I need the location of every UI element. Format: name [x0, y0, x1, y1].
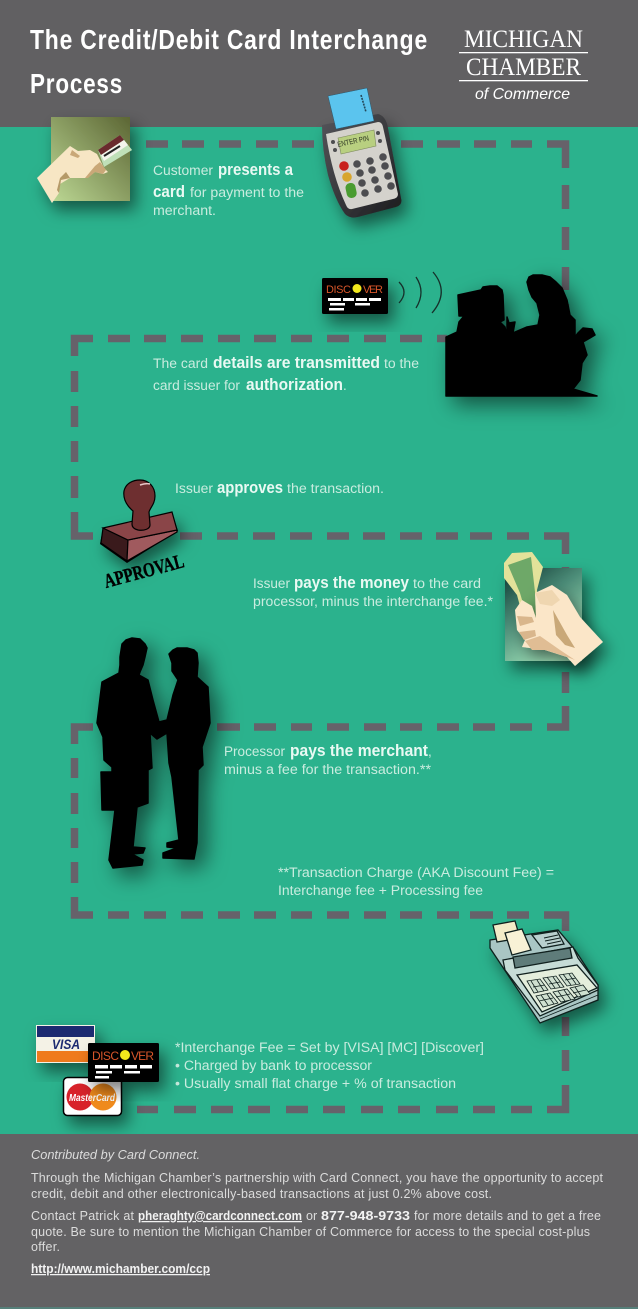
text: step 5: minus a fee for the transaction.**	[224, 762, 432, 777]
icon: two businessmen shaking hands	[97, 638, 210, 868]
text: step 5: ,	[428, 744, 432, 759]
text: interchange fee note: • Usually small flat charge + % of transaction	[175, 1076, 456, 1091]
text: interchange fee note: • Charged by bank to processor	[175, 1058, 373, 1073]
web link: http://www.michamber.com/ccp	[31, 1262, 210, 1276]
title: The Credit/Debit Card Interchange	[30, 24, 428, 55]
text: step 3	[175, 478, 384, 497]
logo: Michigan Chamber of Commerce	[459, 26, 588, 103]
text: step 4: processor, minus the interchange fee.*	[253, 594, 494, 609]
icon: Discover card small	[88, 1043, 159, 1082]
text: step 3: the transaction.	[287, 481, 384, 496]
icon: MasterCard	[64, 1078, 122, 1116]
icon: adding machine	[490, 921, 598, 1023]
footer panel	[0, 1134, 638, 1309]
title: Process	[30, 68, 123, 99]
text: step 2: to the	[384, 356, 419, 371]
text: step 3: Issuer	[175, 481, 214, 496]
icon: hand holding money	[504, 552, 603, 666]
header band	[0, 0, 638, 127]
text: step 3: approves	[217, 478, 283, 497]
title	[30, 24, 428, 99]
text: step 5: Processor	[224, 744, 285, 759]
icon: Discover card: VER	[363, 284, 383, 296]
icon: Visa card: VISA	[52, 1036, 80, 1052]
contact paragraph	[31, 1209, 601, 1254]
text: step 2: authorization	[246, 375, 343, 394]
text: step 1: Customer	[153, 163, 214, 178]
text: step 4: to the card	[413, 576, 481, 591]
icon: card terminal	[322, 88, 401, 218]
contact paragraph: or	[306, 1209, 317, 1223]
icon: card terminal: ENTER PIN	[337, 133, 370, 149]
logo: Michigan Chamber of Commerce: of Commerce	[475, 86, 570, 103]
text: transaction charge note: **Transaction Charge (AKA Discount Fee) =	[278, 865, 554, 880]
icon: hand presenting card	[37, 117, 132, 203]
text: step 5	[224, 741, 432, 777]
text: step 1: merchant.	[153, 203, 216, 218]
icon: Discover card small: DISC	[92, 1049, 119, 1063]
text: step 1: presents a	[218, 160, 293, 179]
icon: Discover card: DISC	[326, 284, 351, 296]
text: step 2: details are transmitted	[213, 353, 380, 372]
contact paragraph: 877-948-9733	[321, 1209, 410, 1223]
contributed by: Contributed by Card Connect.	[31, 1148, 200, 1162]
logo: Michigan Chamber of Commerce: CHAMBER	[466, 54, 581, 81]
contact paragraph: Contact Patrick at	[31, 1209, 135, 1223]
text: transaction charge note: Interchange fee + Processing fee	[278, 883, 483, 898]
text: step 1	[153, 160, 304, 218]
text: step 2: card issuer for	[153, 378, 241, 393]
contact paragraph: quote. Be sure to mention the Michigan Chamber of Commerce for access to the special cost-plus	[31, 1225, 590, 1239]
partnership paragraph: credit, debit and other electronically-based transactions at just 0.2% above cost.	[31, 1187, 492, 1201]
text: step 2: The card	[153, 356, 208, 371]
text: interchange fee note: *Interchange Fee = Set by [VISA] [MC] [Discover]	[175, 1040, 484, 1055]
text: step 5: pays the merchant	[290, 741, 428, 760]
icon: Discover card	[322, 278, 388, 314]
dashed process path	[74, 144, 566, 1110]
text: transaction charge note	[278, 865, 554, 898]
stamp label: APPROVAL	[102, 550, 187, 593]
text: step 2: .	[343, 378, 347, 393]
icon: transmission arcs	[399, 272, 441, 313]
icon: approval stamp	[100, 480, 187, 593]
logo: Michigan Chamber of Commerce: MICHIGAN	[464, 26, 583, 53]
text: step 4: Issuer	[253, 576, 291, 591]
contact paragraph: for more details and to get a free	[414, 1209, 601, 1223]
icon: Visa card	[36, 1025, 95, 1063]
partnership paragraph: Through the Michigan Chamber’s partnership with Card Connect, you have the opportunity to accept	[31, 1171, 604, 1185]
text: step 1: for payment to the	[190, 185, 304, 200]
text: step 4: pays the money	[294, 573, 409, 592]
icon: silhouette of clerk at desk	[446, 275, 597, 396]
partnership paragraph	[31, 1171, 604, 1201]
contact paragraph: offer.	[31, 1240, 60, 1254]
text: step 1: card	[153, 182, 185, 201]
icon: Discover card small: VER	[131, 1049, 154, 1063]
text: interchange fee note	[175, 1040, 484, 1091]
contact paragraph: pheraghty@cardconnect.com	[138, 1209, 302, 1223]
icon: MasterCard: MasterCard	[69, 1092, 115, 1104]
text: step 4	[253, 573, 494, 609]
text: step 2	[153, 353, 419, 394]
